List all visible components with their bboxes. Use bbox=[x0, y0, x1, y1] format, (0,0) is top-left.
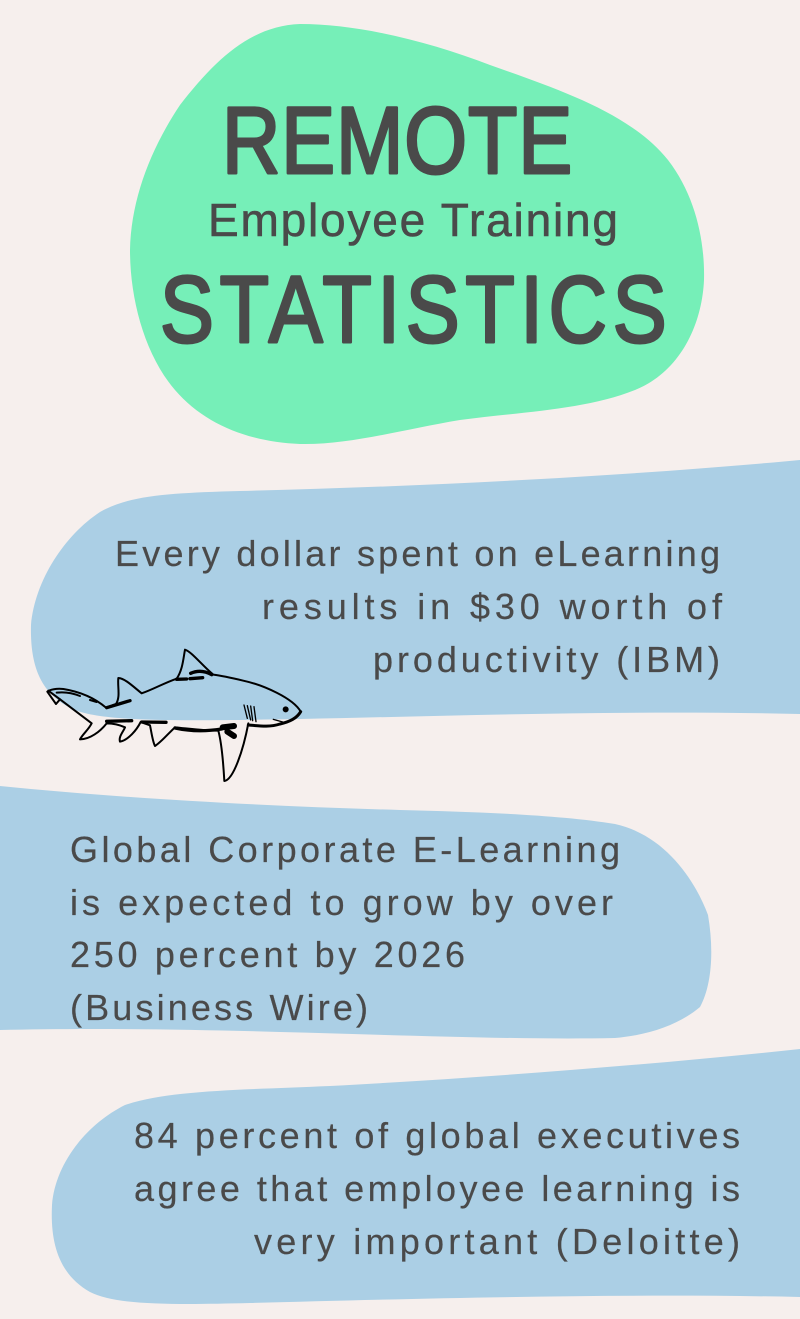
panel: deloitte statistic bbox=[52, 1049, 800, 1304]
icon: shark bbox=[47, 650, 301, 781]
text block: deloitte statistic: agree that employee learning is bbox=[134, 1168, 740, 1209]
text block: business wire statistic: (Business Wire) bbox=[70, 987, 368, 1028]
panel: business wire statistic bbox=[0, 786, 711, 1038]
text block: deloitte statistic bbox=[134, 1115, 740, 1262]
text block: ibm statistic: Every dollar spent on eLearning bbox=[115, 533, 720, 574]
text block: business wire statistic: is expected to grow by over bbox=[70, 882, 613, 923]
text block: ibm statistic bbox=[115, 533, 723, 680]
text block: ibm statistic: results in $30 worth of bbox=[262, 586, 723, 627]
text block: ibm statistic: productivity (IBM) bbox=[373, 639, 720, 680]
title bbox=[160, 87, 667, 362]
text block: business wire statistic bbox=[70, 829, 620, 1028]
text block: deloitte statistic: very important (Deloitte) bbox=[254, 1221, 740, 1262]
text block: business wire statistic: 250 percent by 2026 bbox=[70, 934, 465, 975]
panel: ibm statistic bbox=[31, 460, 800, 720]
panel: title blob bbox=[130, 24, 704, 444]
heading: remote: REMOTE bbox=[222, 87, 572, 193]
text block: business wire statistic: Global Corporate E-Learning bbox=[70, 829, 620, 870]
heading: statistics: STATISTICS bbox=[160, 256, 667, 362]
heading: employee training: Employee Training bbox=[208, 194, 618, 246]
text block: deloitte statistic: 84 percent of global executives bbox=[134, 1115, 740, 1156]
